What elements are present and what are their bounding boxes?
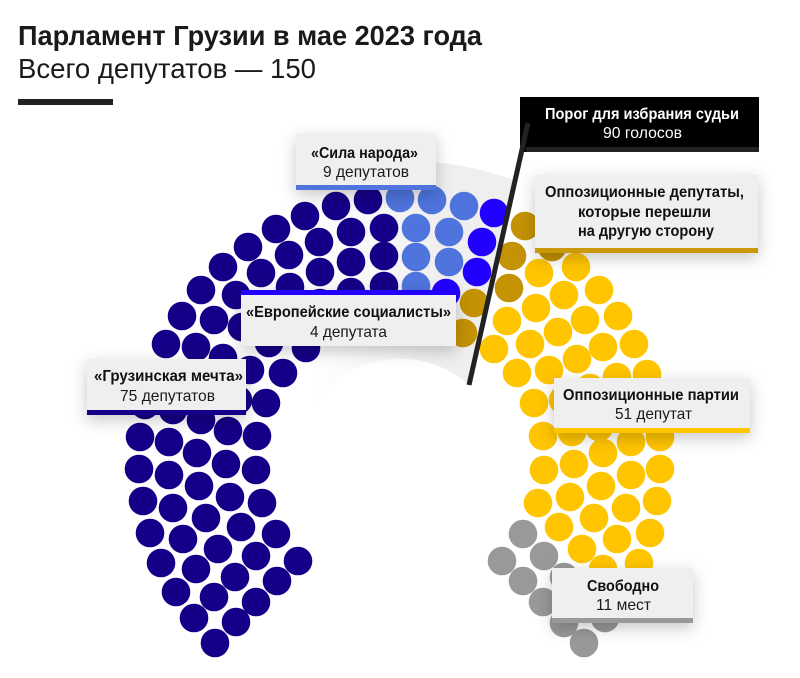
label: Оппозиционные депутаты: Оппозиционные депутаты, <box>545 184 744 201</box>
dots: defected opposition deputies <box>449 212 566 347</box>
label: Оппозиционные партии: 51 депутат <box>615 406 693 423</box>
background arc sector <box>300 161 513 430</box>
dots: Power of the People <box>386 184 478 330</box>
label: Сила народа <box>296 134 436 190</box>
label: Сила народа: «Сила народа» <box>311 145 418 162</box>
threshold line <box>469 123 528 385</box>
label: threshold: 90 голосов <box>603 125 682 142</box>
label: threshold <box>520 97 759 152</box>
label: Оппозиционные партии: Оппозиционные партии <box>563 387 739 404</box>
label: Европейские социалисты: 4 депутата <box>310 324 387 341</box>
title rule <box>18 99 113 105</box>
label: Оппозиционные депутаты <box>535 175 758 253</box>
label: Сила народа: 9 депутатов <box>323 164 409 181</box>
title: Парламент Грузии в мае 2023 года <box>18 20 482 51</box>
label: Грузинская мечта: «Грузинская мечта» <box>94 368 243 385</box>
dots: Georgian Dream <box>125 186 398 657</box>
label: Европейские социалисты: «Европейские социалисты» <box>246 304 451 321</box>
label: Грузинская мечта: 75 депутатов <box>120 388 215 405</box>
label: Оппозиционные депутаты: которые перешли <box>578 204 711 221</box>
label: Оппозиционные партии <box>554 378 750 433</box>
label: Свободно: 11 мест <box>596 597 652 614</box>
dots: opposition parties <box>480 253 674 583</box>
label: Оппозиционные депутаты: на другую сторону <box>578 223 714 240</box>
dots: European Socialists <box>432 199 508 307</box>
label: threshold: Порог для избрания судьи <box>545 106 739 123</box>
label: Европейские социалисты <box>241 290 456 346</box>
label: Свободно: Свободно <box>587 578 659 595</box>
dots: vacant seats <box>488 520 619 657</box>
label: Грузинская мечта <box>87 359 246 415</box>
subtitle: Всего депутатов — 150 <box>18 53 316 84</box>
label: Свободно <box>552 568 693 623</box>
